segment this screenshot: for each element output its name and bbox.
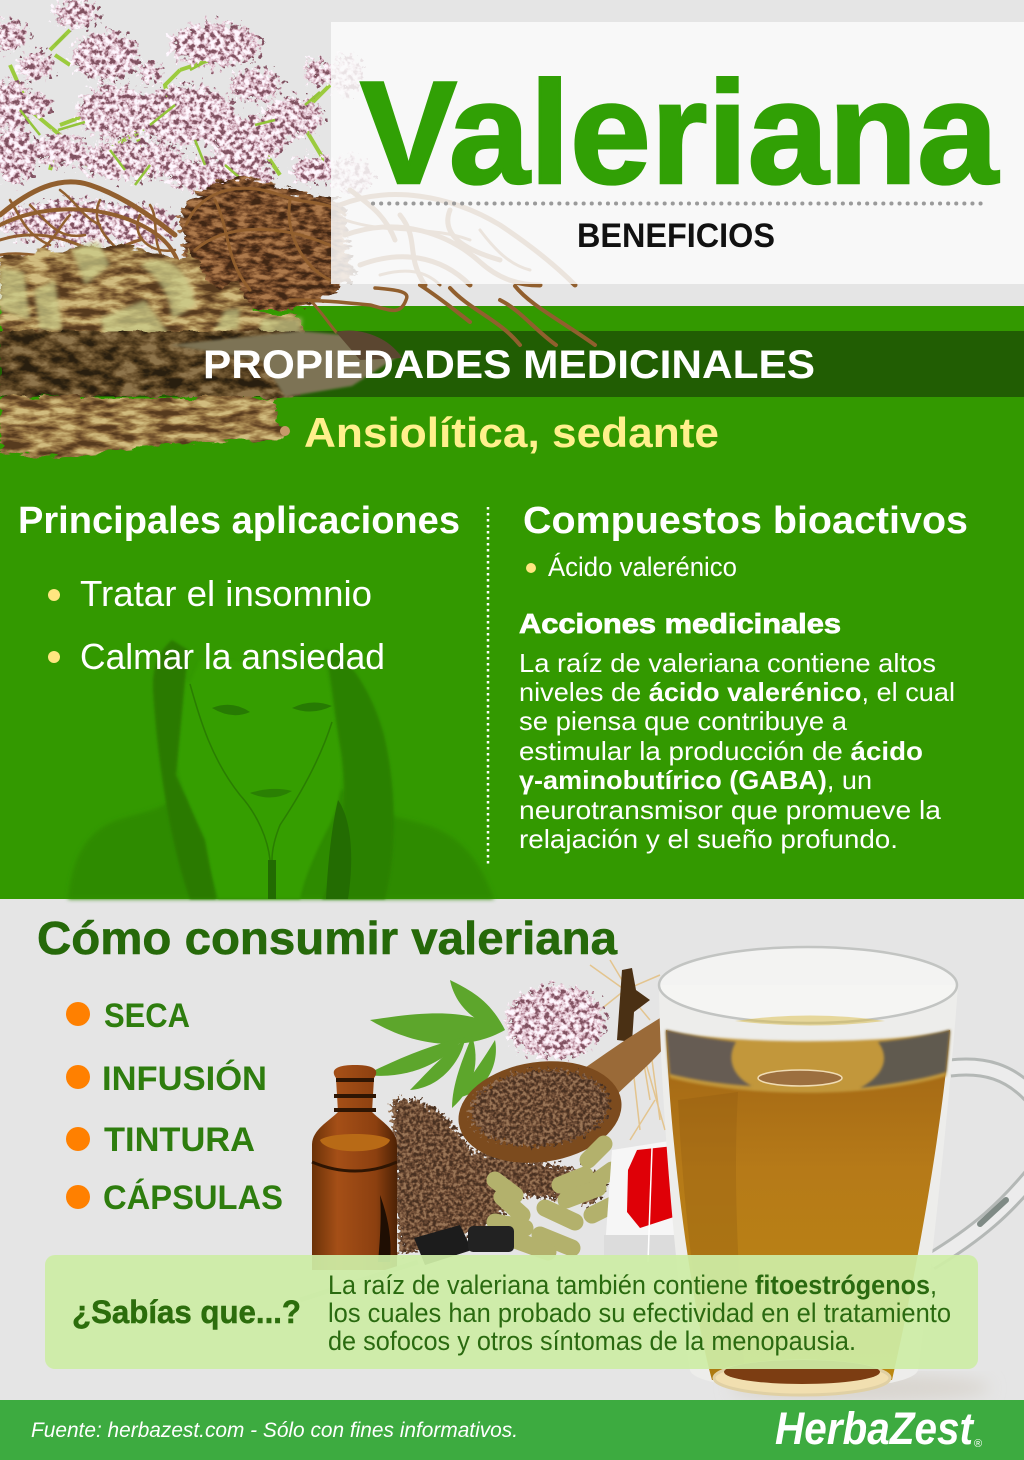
callout: did you know — [45, 1255, 978, 1369]
icon: spoon seeds — [467, 1064, 613, 1152]
bullet: compound — [526, 563, 536, 573]
footer source text: Fuente: herbazest.com - Sólo con fines informativos. — [31, 1419, 518, 1442]
footer bar — [0, 1400, 1024, 1460]
bullet: tintura — [66, 1127, 90, 1151]
callout text: de sofocos y otros síntomas de la menopausia. — [328, 1326, 856, 1356]
item: Calmar la ansiedad: Calmar la ansiedad — [80, 636, 385, 677]
dark hair lock — [326, 800, 351, 899]
item: Ácido valerénico: Ácido valerénico — [548, 552, 737, 582]
surface shade left — [666, 1030, 752, 1086]
callout heading: ¿Sabías que...? — [72, 1294, 301, 1330]
plant: flowers, roots and dried pieces — [0, 0, 595, 458]
bullet: insomnio — [48, 589, 60, 601]
photo: woman with hands on face — [68, 640, 494, 899]
eyes — [212, 702, 332, 715]
icon: tea bag — [604, 1138, 692, 1262]
panel: principales aplicaciones — [18, 500, 460, 677]
icon: glass mug of tea — [659, 947, 1024, 1402]
panel: compuestos bioactivos — [519, 500, 968, 854]
mug handle highlight — [980, 1200, 1006, 1224]
green flecks over flowers — [20, 35, 320, 185]
mug base — [714, 1361, 890, 1395]
dark root tip at band — [336, 330, 402, 360]
hands and face — [176, 660, 341, 899]
item: Tratar el insomnio: Tratar el insomnio — [80, 573, 372, 614]
callout text: los cuales han probado su efectividad en el tratamiento — [328, 1298, 951, 1328]
green properties panel — [0, 306, 1024, 899]
pale wood piece in band — [170, 331, 400, 397]
shoulders — [68, 790, 494, 899]
paragraph: medicinal actions: se piensa que contribuye a — [519, 706, 848, 736]
paragraph: medicinal actions — [519, 648, 955, 854]
glass rim — [659, 947, 957, 1023]
left hair — [153, 640, 216, 899]
column divider — [487, 507, 489, 867]
surface shade right — [860, 1030, 950, 1088]
paragraph: medicinal actions: estimular la producción de ácido — [519, 736, 923, 766]
bullet: ansiedad — [48, 651, 60, 663]
callout box — [45, 1255, 978, 1369]
paragraph: medicinal actions: relajación y el sueño profundo. — [519, 824, 898, 854]
left hand outline — [190, 684, 270, 860]
heading: Propiedades medicinales: PROPIEDADES MEDICINALES — [203, 343, 815, 387]
flower stems — [10, 30, 330, 175]
subheading: Ansiolítica, sedante: Ansiolítica, sedante — [304, 409, 719, 456]
heading: Cómo consumir valeriana: Cómo consumir valeriana — [37, 912, 617, 964]
icon: capsules — [495, 1144, 612, 1252]
item: infusión: INFUSIÓN — [102, 1060, 267, 1098]
item: seca: SECA — [104, 997, 190, 1035]
list: forms of consumption — [66, 997, 283, 1217]
photo: valerian preparations — [300, 947, 1024, 1402]
bullet: cápsulas — [66, 1185, 90, 1209]
callout text: La raíz de valeriana también contiene fitoestrógenos, — [328, 1270, 937, 1300]
tea side shade — [678, 1092, 745, 1380]
icon: pink flower cluster — [505, 986, 605, 1058]
root mass — [180, 179, 352, 312]
hand gap — [268, 860, 276, 899]
icon: scattered seeds — [392, 1098, 610, 1255]
paragraph: medicinal actions: γ-aminobutírico (GABA) , un — [519, 765, 872, 795]
dried root pieces: upper — [0, 245, 305, 335]
callout text — [328, 1270, 951, 1356]
paragraph: medicinal actions: neurotransmisor que promueve la — [519, 795, 942, 825]
pale cut stems — [0, 240, 302, 335]
band: propiedades medicinales — [0, 331, 1024, 397]
tea liquid — [666, 1030, 950, 1380]
title dotted rule — [373, 202, 985, 206]
heading: Compuestos bioactivos: Compuestos bioactivos — [523, 500, 968, 542]
heading: Principales aplicaciones: Principales aplicaciones — [18, 500, 460, 542]
dried root pieces: lower — [0, 397, 290, 458]
icon: wooden spoon — [452, 1015, 665, 1173]
mug shadow — [730, 1374, 990, 1402]
logo: HerbaZest: HerbaZest — [775, 1403, 975, 1454]
root behind spoon — [590, 960, 665, 1140]
item: tintura: TINTURA — [104, 1121, 255, 1159]
mug handle glass — [930, 1067, 1024, 1262]
icon: tincture bottle — [312, 1065, 397, 1270]
mug handle — [930, 1067, 1024, 1262]
yellow crescent — [735, 1016, 885, 1026]
right hand outline — [272, 722, 332, 860]
bullet: infusión — [66, 1065, 90, 1089]
paragraph: medicinal actions: La raíz de valeriana contiene altos — [519, 648, 936, 678]
mouth — [250, 789, 292, 798]
mug base liquid — [724, 1360, 880, 1384]
icon: green leaves — [365, 980, 505, 1108]
thin roots — [0, 182, 595, 345]
title: Valeriana: Valeriana — [360, 51, 1000, 214]
item: cápsulas: CÁPSULAS — [103, 1179, 283, 1217]
surface reflection — [758, 1070, 842, 1086]
logo: HerbaZest: ® — [974, 1438, 982, 1450]
small dried tip — [280, 426, 290, 436]
icon: dropper — [300, 1225, 514, 1300]
liquid surface — [666, 1030, 950, 1093]
heading: Acciones medicinales: Acciones medicinales — [519, 608, 841, 639]
title panel — [331, 22, 1024, 284]
dried root pieces: middle — [0, 331, 300, 397]
glass body — [659, 985, 958, 1390]
paragraph: medicinal actions: niveles de ácido valerénico , el cual — [519, 677, 955, 707]
subtitle: Beneficios: BENEFICIOS — [577, 217, 775, 255]
flower clusters — [0, 0, 372, 245]
icon: dried root stalk — [617, 968, 650, 1042]
bullet: seca — [66, 1002, 90, 1026]
right hair — [322, 650, 394, 899]
